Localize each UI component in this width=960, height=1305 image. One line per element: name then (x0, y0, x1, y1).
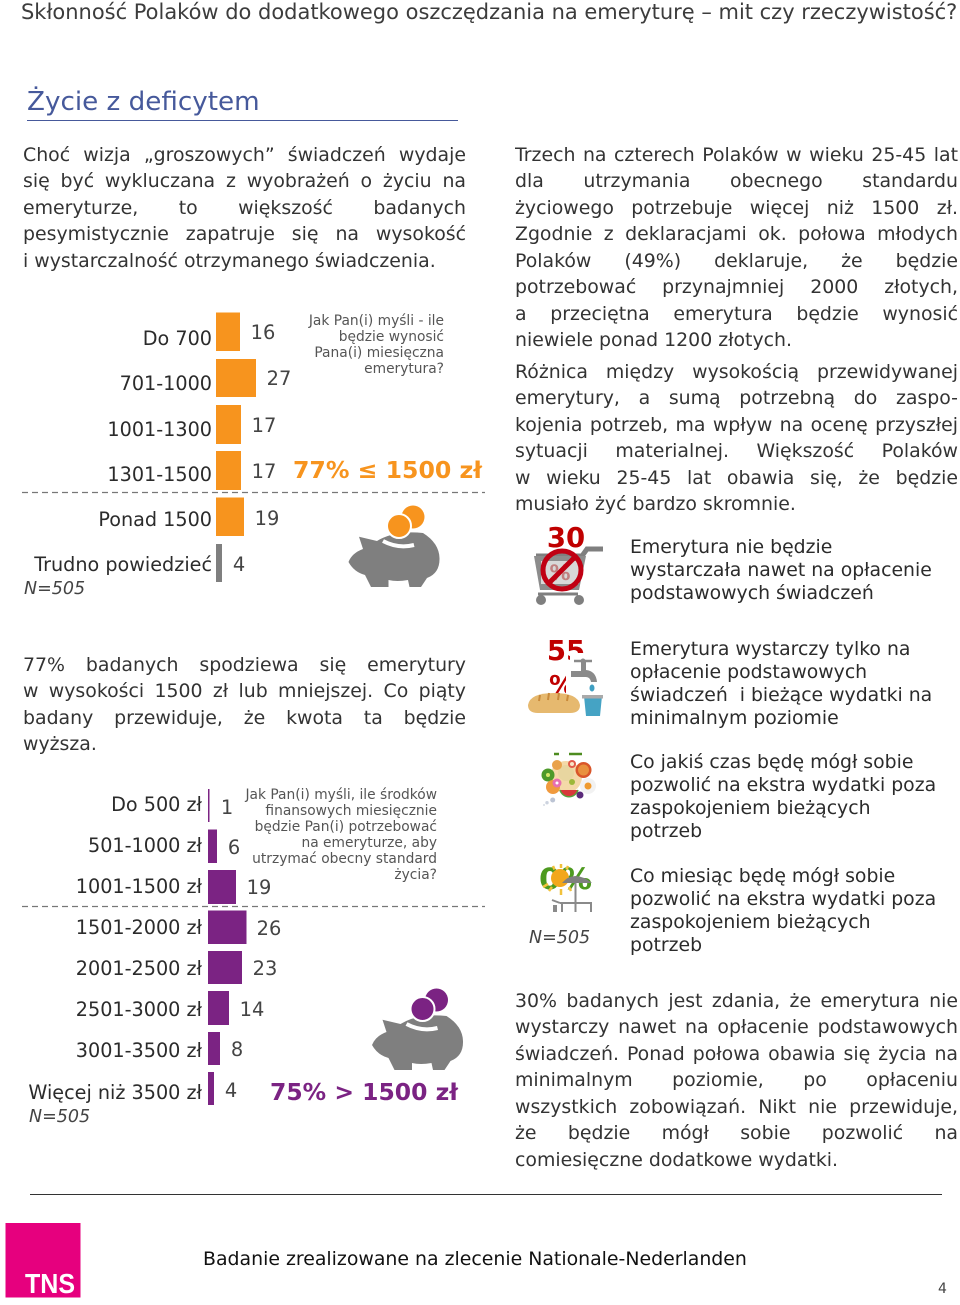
callout: 75%: 75% > 1500 zł (270, 1078, 459, 1106)
value labels: 26 (257, 917, 281, 940)
text block: closing summary: 30% badanych jest zdania, że emerytura nie (515, 990, 958, 1012)
value labels (221, 796, 281, 1102)
bars: purple (208, 789, 246, 1105)
question: Pana(i) miesięczna (314, 345, 444, 361)
text block: intro left: się być wykluczana z wyobrażeń o życiu na (23, 170, 466, 192)
text block: right column first paragraph: potrzebować przynajmniej 2000 złotych, (515, 276, 958, 298)
category labels: Do 500 zł (111, 793, 203, 816)
text block: right column first paragraph: Zgodnie z deklaracjami ok. połowa młodych (515, 223, 958, 245)
value labels: 17 (252, 414, 276, 437)
category labels: 1001-1500 zł (76, 875, 203, 898)
question: na emeryturze, aby (301, 835, 437, 851)
icon: shopping cart with prohibition sign (534, 522, 603, 605)
value labels: 14 (240, 998, 264, 1021)
icon: shopping cart with prohibition sign: % (549, 561, 571, 585)
text block: closing summary: wystarczy nawet na opłacenie podstawowych (515, 1016, 958, 1038)
sample size: N=505 (29, 1107, 90, 1127)
page number: 4 (938, 1281, 947, 1297)
text block: closing summary: że będzie mógł sobie pozwolić na (515, 1122, 958, 1144)
sample size: N=505 (529, 928, 590, 948)
text block: right column second paragraph: Różnica między wysokością przewidywanej (515, 361, 958, 383)
text block: closing summary: minimalnym poziomie, po opłaceniu (515, 1069, 958, 1091)
text block: closing summary: wszystkich zobowiązań. Nikt nie przewiduje, (515, 1096, 958, 1118)
category labels: 701-1000 (120, 372, 212, 395)
text block: right column first paragraph (515, 144, 958, 351)
value labels: 17 (252, 460, 276, 483)
category labels: 2001-2500 zł (76, 957, 203, 980)
value labels: 27 (267, 367, 291, 390)
sample size: N=505 (24, 579, 85, 599)
text block: right column second paragraph: sytuacji materialnej. Większość Polaków (515, 440, 958, 462)
bars: orange (216, 312, 256, 582)
text block: 77 percent summary: badany przewiduje, że kwota ta będzie (23, 707, 466, 729)
question: emerytura? (364, 361, 444, 377)
logo: TNS (6, 1223, 80, 1299)
category labels: 2501-3000 zł (76, 998, 203, 1021)
value labels: 19 (247, 876, 271, 899)
text block: intro left: emeryturze, to większość badanych (23, 197, 466, 219)
category labels: 501-1000 zł (88, 834, 203, 857)
text block: right column second paragraph: emerytury, a sumą potrzebną do zaspo- (515, 387, 958, 409)
section heading (27, 85, 458, 121)
question (244, 787, 437, 883)
value labels: 6 (228, 836, 240, 859)
value labels: 8 (231, 1038, 243, 1061)
icon: sun and umbrella: 0% (539, 862, 592, 896)
text block: closing summary: świadczeń. Ponad połowa obawia się życia na (515, 1043, 958, 1065)
value labels: 4 (233, 553, 245, 576)
section heading: Życie z deficytem (27, 87, 260, 117)
category labels: 1501-2000 zł (76, 916, 203, 939)
footer note: Badanie zrealizowane na zlecenie Nationale-Nederlanden (203, 1248, 747, 1270)
text block: intro left: i wystarczalność otrzymanego świadczenia. (23, 250, 436, 272)
logo: TNS: TNS (25, 1268, 75, 1299)
text: item 15%: potrzeb (630, 820, 702, 842)
value labels: 1 (221, 796, 233, 819)
category labels: Trudno powiedzieć (33, 553, 212, 576)
question: Jak Pan(i) myśli, ile środków (244, 787, 437, 803)
question: Jak Pan(i) myśli - ile (308, 313, 444, 329)
text: item 30% (630, 536, 932, 604)
bar chart: expected pension (22, 312, 485, 599)
text: item 30%: wystarczała nawet na opłacenie (630, 560, 932, 580)
text: item 30%: Emerytura nie będzie (630, 536, 832, 558)
text block: closing summary (515, 990, 958, 1171)
value labels: 23 (253, 957, 277, 980)
text block: right column first paragraph: dla utrzymania obecnego standardu (515, 170, 958, 192)
text block: intro left: pesymistycznie zapatruje się na wysokość (23, 223, 466, 245)
icon: piggy bank orange (348, 506, 440, 587)
category labels: Ponad 1500 (98, 508, 212, 531)
text block: 77 percent summary: wyższa. (23, 733, 97, 755)
category labels: 1301-1500 (107, 463, 212, 486)
text block: right column first paragraph: Trzech na czterech Polaków w wieku 25-45 lat (515, 144, 958, 166)
text block: right column first paragraph: Polaków (49%) deklaruje, że będzie (515, 250, 958, 272)
text: item 30%: podstawowych świadczeń (630, 582, 874, 604)
category labels (28, 793, 203, 1104)
text block: right column first paragraph: a przeciętna emerytura będzie wynosić (515, 303, 958, 325)
category labels: Do 700 (143, 327, 212, 350)
icon: shopping cart with prohibition sign: 30 (547, 522, 585, 554)
value labels: 16 (251, 321, 275, 344)
question: będzie Pan(i) potrzebować (255, 819, 437, 835)
icon: piggy bank purple (372, 988, 463, 1070)
callout: 77%: 77% ≤ 1500 zł (293, 456, 483, 484)
text: item 0%: potrzeb (630, 934, 702, 956)
text: item 55%: świadczeń i bieżące wydatki na (630, 684, 932, 706)
text: item 55%: Emerytura wystarczy tylko na (630, 638, 910, 660)
question: życia? (394, 867, 437, 883)
value labels: 4 (225, 1079, 237, 1102)
text block: intro left (23, 144, 466, 272)
text block: closing summary: comiesięczne dodatkowe wydatki. (515, 1149, 838, 1171)
category labels: 3001-3500 zł (76, 1039, 203, 1062)
text block: right column first paragraph: życiowego potrzebuje więcej niż 1500 zł. (515, 197, 958, 219)
text: item 15%: zaspokojeniem bieżących (630, 798, 871, 818)
text block: 77 percent summary: w wysokości 1500 zł lub mniejszej. Co piąty (23, 680, 466, 702)
category labels: Więcej niż 3500 zł (28, 1081, 203, 1104)
text: item 15%: pozwolić na ekstra wydatki poza (630, 774, 936, 796)
icon: bread and water tap: 55 (547, 635, 585, 667)
question: będzie wynosić (339, 329, 444, 345)
text block: intro left: Choć wizja „groszowych” świadczeń wydaje (23, 144, 466, 166)
text block: right column second paragraph: kojenia potrzeb, ma wpływ na ocenę przyszłej (515, 414, 958, 436)
text: item 0%: Co miesiąc będę mógł sobie (630, 866, 895, 886)
text block: right column second paragraph: musiało żyć bardzo skromnie. (515, 493, 796, 515)
text: item 15%: Co jakiś czas będę mógł sobie (630, 752, 913, 772)
bar chart: needed funds (22, 787, 485, 1127)
category labels: 1001-1300 (107, 418, 212, 441)
text block: 77 percent summary: 77% badanych spodziewa się emerytury (23, 654, 466, 676)
text: item 55%: opłacenie podstawowych (630, 662, 867, 682)
text: item 0%: zaspokojeniem bieżących (630, 912, 871, 932)
value labels (233, 321, 291, 576)
icon: bread and water tap: % (549, 671, 575, 701)
question (308, 313, 444, 377)
question: finansowych miesięcznie (265, 803, 437, 819)
question: utrzymać obecny standard (252, 851, 437, 867)
value labels: 19 (255, 507, 279, 530)
category labels (33, 327, 212, 576)
text block: right column second paragraph (515, 361, 958, 515)
icon: food thought bubble (542, 752, 596, 806)
text: item 55%: minimalnym poziomie (630, 708, 839, 728)
text: item 0% (630, 866, 936, 956)
text block: 77 percent summary (23, 654, 466, 755)
text: item 15% (630, 752, 936, 842)
text block: right column second paragraph: w wieku 25-45 lat obawia się, że będzie (515, 467, 958, 489)
text: item 55% (630, 638, 932, 728)
page title: Skłonność Polaków do dodatkowego oszczędzania na emeryturę – mit czy rzeczywistość? (21, 0, 957, 24)
text block: right column first paragraph: niewiele ponad 1200 złotych. (515, 329, 792, 351)
icon: sun and umbrella (539, 862, 592, 912)
icon: bread and water tap (528, 635, 603, 716)
text: item 0%: pozwolić na ekstra wydatki poza (630, 888, 936, 910)
